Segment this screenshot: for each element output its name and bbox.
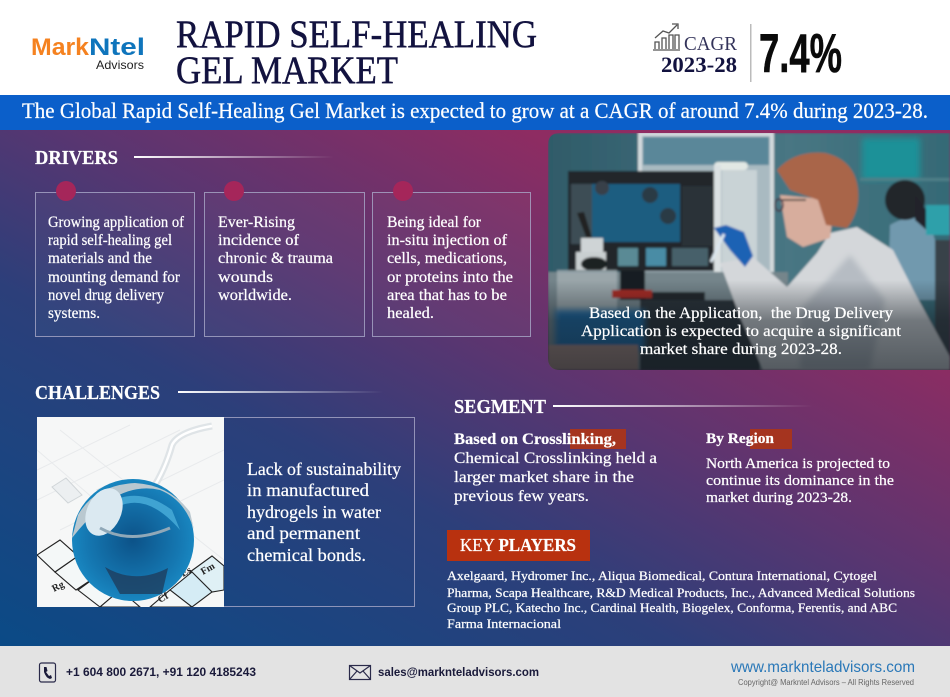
heading: key players: KEY PLAYERS [460,535,576,555]
logo: MarkNtel Advisors: Mark [31,34,90,61]
logo: MarkNtel Advisors: Advisors [96,58,144,72]
panel: driver 2: Ever-Rising [218,214,295,231]
heading: segment: SEGMENT [454,396,547,418]
segment: region: North America is projected to [706,456,890,472]
title: GEL MARKET [176,49,398,92]
banner: The Global Rapid Self-Healing Gel Market is expected to grow at a CAGR of around 7.4% during 2023-28. [22,98,928,123]
panel: driver 3: cells, medications, [387,250,507,267]
key players list: Farma Internacional [447,616,561,631]
glass tube [152,426,212,490]
panel: challenge: in manufactured [247,480,369,500]
segment: crosslinking: previous few years. [454,488,589,505]
panel: driver 2 [204,181,364,336]
flask [72,479,194,601]
panel: challenge: hydrogels in water [247,502,381,522]
panel: driver 1: mounting demand for [48,269,181,286]
segment: crosslinking: larger market share in the [454,469,634,486]
segment: region: By Region [706,431,775,447]
email: sales@marknteladvisors.com [378,665,539,679]
logo: MarkNtel Advisors: Ntel [89,34,145,61]
CAGR block: CAGR [684,33,738,55]
panel: driver 2: worldwide. [218,287,292,304]
key players list: Pharma, Scapa Healthcare, R&D Medical Products, Inc., Advanced Medical Solutions [447,585,915,600]
segment: region [706,429,894,506]
title [176,13,537,92]
panel: lab photo with caption [548,133,950,370]
panel: driver 1: systems. [48,305,100,322]
panel: challenge: and permanent [247,523,360,543]
panel: driver 3: area that has to be [387,287,507,304]
segment: region: continue its dominance in the [706,473,894,489]
panel: driver 1: Growing application of [48,214,185,231]
CAGR value: 7.4% [759,22,842,84]
website: www.marknteladvisors.com [730,659,915,676]
panel: driver 1 [36,181,194,336]
image: blue flask on periodic table: Es [179,565,194,580]
icon: email [350,666,370,680]
title: RAPID SELF-HEALING [176,13,537,56]
panel: driver 2: chronic & trauma [218,250,333,267]
phone numbers: +1 604 800 2671, +91 120 4185243 [66,665,256,679]
microscope [577,212,592,242]
key players list: Axelgaard, Hydromer Inc., Aliqua Biomedical, Contura International, Cytogel [447,568,877,583]
heading: drivers: DRIVERS [35,147,118,169]
glove [714,225,753,267]
panel: lab photo with caption: market share during 2023-28. [640,341,842,358]
caption shade [548,280,950,370]
rack and sample tubes [557,270,617,320]
segment: region: market during 2023-28. [706,490,852,506]
icon: phone [40,663,56,682]
segment: crosslinking: Chemical Crosslinking held a [454,450,657,467]
window frame [640,134,772,274]
background colleague [888,218,938,300]
image: blue flask on periodic table: Fm [199,561,218,578]
panel: challenge: Lack of sustainability [247,459,401,479]
scientist coat [720,227,950,370]
panel: lab photo with caption: Application is expected to acquire a significant [581,323,902,340]
image: blue flask on periodic table: Cf [156,590,171,606]
segment: crosslinking: Based on Crosslinking, [454,431,616,448]
header background [0,0,950,95]
divider [750,24,752,82]
copyright: Copyright@ Markntel Advisors – All Rights Reserved [738,678,914,687]
panel: driver 3: or proteins into the [387,269,513,286]
panel: challenge [37,417,414,607]
icon: growth chart [653,24,680,50]
panel: driver 1: rapid self-healing gel [48,232,172,249]
heading: key players [447,530,590,561]
segment: crosslinking [454,429,657,505]
key players list [447,568,915,631]
scientist hair [777,153,858,228]
image: blue flask on periodic table [37,417,224,607]
panel: gradient body [0,130,950,646]
footer [0,646,950,697]
panel: driver 3: in-situ injection of [387,232,508,249]
panel: driver 2: incidence of [218,232,300,249]
panel: driver 1: novel drug delivery [48,287,164,304]
CAGR block: 2023-28 [661,52,737,77]
monitor [620,268,645,300]
logo: MarkNtel Advisors [31,34,145,72]
scientist face [780,195,835,247]
image: blue flask on periodic table: Rg [50,579,66,595]
key players list: Group PLC, Katecho Inc., Cardinal Health, Biogelex, Conforma, Ferentis, and ABC [447,600,897,615]
heading: challenges: CHALLENGES [35,382,160,404]
panel: driver 3: Being ideal for [387,214,482,231]
background shelf teal [862,138,920,180]
bench [548,272,788,370]
glasses [782,199,806,201]
panel: driver 2: wounds [218,269,273,286]
banner [0,95,950,130]
panel: challenge: chemical bonds. [247,545,366,565]
CAGR block [653,24,738,77]
panel: driver 1: materials and the [48,250,152,267]
panel: lab photo with caption: Based on the Application, the Drug Delivery [589,305,893,322]
panel: driver 3: healed. [387,305,434,322]
panel: driver 3 [372,181,530,336]
